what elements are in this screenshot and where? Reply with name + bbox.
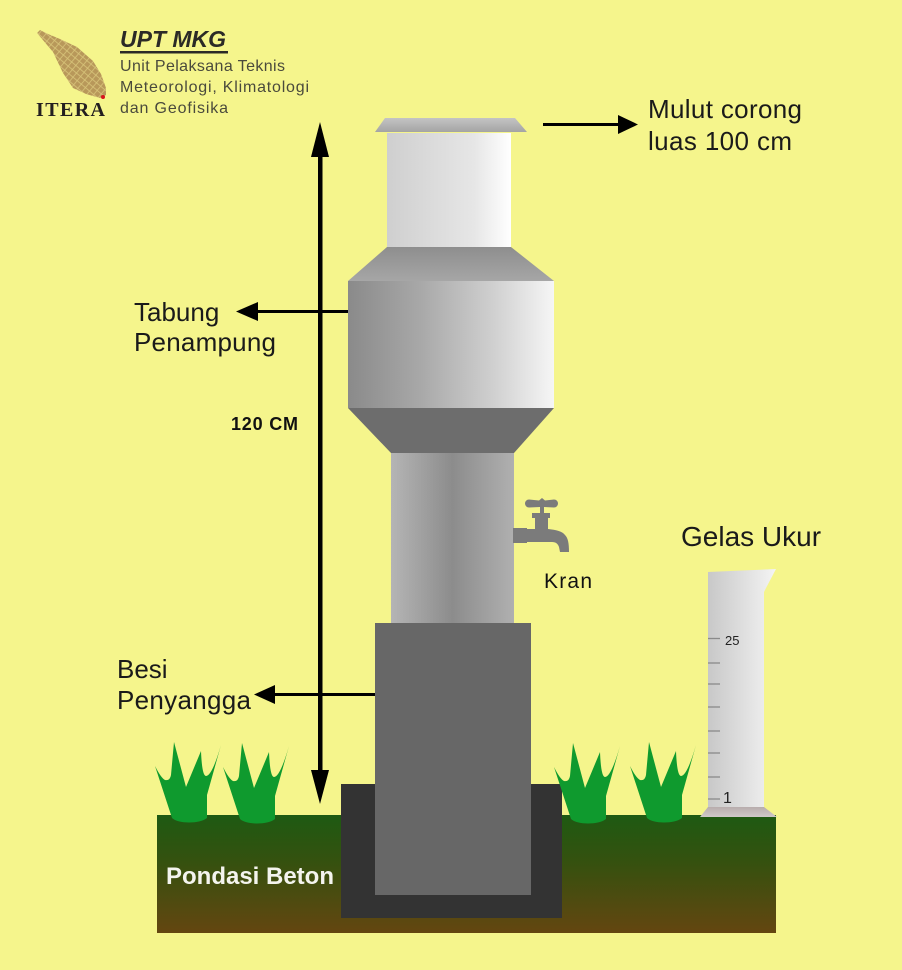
label: Mulut corong: luas 100 cm xyxy=(648,126,792,156)
label: Tabung Penampung: Tabung xyxy=(134,297,219,327)
label: Gelas Ukur: Gelas Ukur xyxy=(681,521,821,552)
label: Pondasi Beton: Pondasi Beton xyxy=(166,863,334,890)
lower cylinder xyxy=(391,453,514,623)
scale number 1: 1 xyxy=(723,790,732,807)
scale number 25: 25 xyxy=(725,633,739,648)
support pole xyxy=(375,623,531,895)
scale ticks xyxy=(708,638,720,799)
logo: ITERA xyxy=(36,30,106,121)
arrow: tabung penampung xyxy=(236,302,348,321)
arrow: funnel mouth xyxy=(543,115,638,134)
grass tuft 1 xyxy=(155,742,221,822)
subtitle text xyxy=(120,58,309,117)
funnel cylinder xyxy=(387,133,511,247)
measuring glass xyxy=(700,569,777,817)
label: Besi Penyangga xyxy=(117,654,252,715)
arrow: besi penyangga xyxy=(254,685,375,704)
icon: faucet xyxy=(513,498,569,552)
logo wordmark: ITERA xyxy=(36,99,106,121)
glass body xyxy=(708,569,776,807)
grass tuft 2 xyxy=(223,743,289,824)
label: Kran: Kran xyxy=(544,570,592,593)
grass tuft 4 xyxy=(630,742,696,822)
label: 120 CM: 120 CM xyxy=(231,414,298,434)
label: Besi Penyangga: Besi xyxy=(117,654,168,684)
icon: Sumatra dot map xyxy=(37,30,106,98)
grass tuft 3 xyxy=(554,743,620,824)
label: Tabung Penampung xyxy=(134,297,276,357)
subtitle text: Unit Pelaksana Teknis xyxy=(120,58,285,75)
label: Mulut corong xyxy=(648,94,802,156)
arrow: 120 cm height xyxy=(311,122,329,804)
ground xyxy=(157,815,776,933)
concrete foundation xyxy=(341,784,562,918)
subtitle text: dan Geofisika xyxy=(120,100,228,117)
label: Besi Penyangga: Penyangga xyxy=(117,685,252,715)
glass base xyxy=(700,807,777,817)
funnel mouth lid xyxy=(375,118,527,132)
label: Tabung Penampung: Penampung xyxy=(134,327,276,357)
bottom cone of tank xyxy=(348,408,554,453)
collection tank xyxy=(348,281,554,408)
label: Mulut corong: Mulut corong xyxy=(648,94,802,124)
subtitle text: Meteorologi, Klimatologi xyxy=(120,79,309,96)
top cone of tank xyxy=(348,247,554,281)
heading: UPT MKG: UPT MKG xyxy=(120,26,226,52)
icon: red dot xyxy=(101,95,105,99)
